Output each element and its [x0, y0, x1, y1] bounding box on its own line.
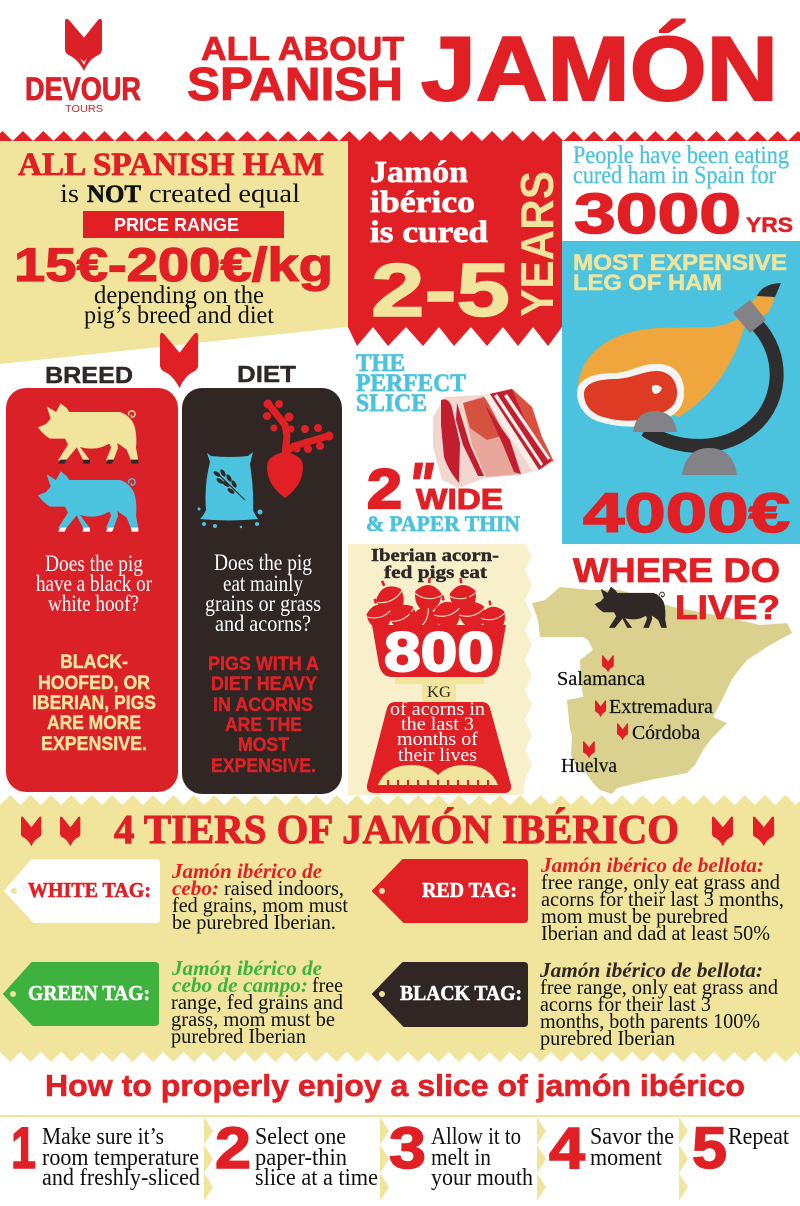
- zigzag border top: [0, 131, 800, 141]
- scale body: their lives: [398, 745, 477, 766]
- map shape: [532, 587, 792, 794]
- price range label: PRICE RANGE: [114, 215, 239, 235]
- white tag description: be purebred Iberian.: [172, 910, 336, 934]
- years label: YEARS: [511, 171, 563, 317]
- icon: black-hoofed pig: [38, 403, 138, 464]
- title: JAMÓN: [421, 19, 778, 120]
- answer: ARE MORE: [47, 713, 141, 734]
- caption: depending on the: [94, 282, 264, 309]
- question: grains or grass: [205, 591, 321, 616]
- panel: most expensive leg: [562, 241, 800, 544]
- step 5: [692, 1116, 789, 1181]
- red tag: [373, 860, 527, 922]
- scale body: the last 3: [401, 714, 474, 735]
- black tag: [373, 963, 527, 1026]
- step 4: [549, 1116, 674, 1181]
- question: [36, 551, 152, 616]
- step 5: Repeat: [728, 1124, 789, 1150]
- answer: [32, 652, 156, 755]
- place names: [557, 668, 713, 777]
- answer: MOST: [238, 735, 289, 756]
- logo wordmark: DEVOUR: [25, 71, 141, 107]
- step 1: 1: [11, 1116, 36, 1181]
- curing text: ibérico: [370, 184, 475, 219]
- answer: BLACK-: [60, 652, 128, 673]
- black tag description: acorns for their last 3: [540, 992, 711, 1016]
- price: 15€-200€/kg: [14, 238, 333, 291]
- question: and acorns?: [215, 611, 311, 636]
- scale body: of acorns in: [390, 699, 486, 720]
- step 3: your mouth: [431, 1165, 533, 1191]
- black tag description: purebred Iberian: [540, 1026, 675, 1050]
- step 2: paper-thin: [255, 1145, 347, 1171]
- white tag description: Jamón ibérico de: [171, 859, 322, 883]
- markers: [583, 655, 628, 758]
- green tag description: range, fed grains and: [171, 990, 343, 1014]
- question: [205, 550, 321, 636]
- place names: Huelva: [561, 755, 617, 777]
- heading: LIVE?: [675, 589, 780, 627]
- heading: THE: [356, 350, 405, 377]
- heading: PERFECT: [356, 370, 466, 397]
- heading: how to enjoy: How to properly enjoy a slice of jamón ibérico: [45, 1068, 745, 1103]
- step 3: melt in: [431, 1145, 491, 1171]
- subheading: created equal: [149, 179, 300, 208]
- heading: SLICE: [356, 390, 427, 417]
- icon: fox head: [65, 19, 102, 71]
- question: have a black or: [36, 571, 152, 596]
- question: white hoof?: [48, 591, 139, 616]
- red tag description: acorns for their last 3 months,: [541, 887, 784, 911]
- scale body: months of: [397, 729, 479, 750]
- black tag: BLACK TAG:: [400, 981, 522, 1005]
- curing text: Jamón: [370, 154, 468, 189]
- icon: white-hoofed pig: [38, 471, 138, 532]
- panel: map of Spain: [532, 552, 792, 794]
- 800 number: 800: [384, 620, 494, 683]
- green tag: GREEN TAG:: [28, 981, 150, 1005]
- red tag: RED TAG:: [422, 878, 517, 902]
- step 1: Make sure it’s: [42, 1124, 164, 1150]
- 3000 number: 3000: [574, 182, 741, 246]
- red tag description: [540, 853, 784, 945]
- panel: 3000 years: [573, 142, 793, 246]
- white tag: WHITE TAG:: [28, 878, 151, 902]
- heading: [573, 552, 780, 627]
- step 3: 3: [389, 1116, 426, 1181]
- panel: breed card: [6, 388, 178, 792]
- step 3: [389, 1116, 533, 1191]
- panel: the perfect slice: [356, 350, 554, 536]
- step 2: 2: [215, 1116, 251, 1181]
- black tag description: Jamón ibérico de bellota:: [539, 958, 763, 982]
- answer: DIET HEAVY: [211, 674, 317, 695]
- question: eat mainly: [223, 571, 303, 596]
- steps: [0, 1115, 800, 1201]
- subheading: [60, 179, 300, 208]
- logo: Devour Tours: [25, 19, 141, 115]
- step 2: [215, 1116, 378, 1191]
- step 4: 4: [549, 1116, 585, 1181]
- place names: Extremadura: [609, 696, 713, 718]
- step 5: 5: [692, 1116, 727, 1181]
- answer: EXPENSIVE.: [41, 734, 147, 755]
- caption: pig’s breed and diet: [84, 302, 274, 329]
- step 4: Savor the: [590, 1124, 674, 1150]
- KG label: KG: [427, 684, 451, 701]
- white tag description: raised indoors,: [224, 876, 344, 900]
- heading: Iberian acorn-: [371, 545, 499, 565]
- scale body: [367, 699, 511, 793]
- heading: 4 TIERS OF JAMÓN IBÉRICO: [114, 806, 679, 852]
- years number: 2-5: [371, 248, 510, 332]
- icon: fox divider: [160, 333, 198, 388]
- white tag description: cebo:: [172, 876, 219, 900]
- panel: 800 kg of acorns: [348, 544, 532, 795]
- icons: fox row left: [21, 816, 80, 846]
- question: Does the pig: [45, 551, 143, 576]
- answer: [208, 654, 319, 777]
- icon: grain sack: [198, 452, 262, 528]
- panel: curing time: [348, 141, 563, 346]
- logo subtitle: TOURS: [65, 104, 103, 115]
- curing text: is cured: [370, 214, 488, 249]
- step 3: Allow it to: [431, 1124, 521, 1150]
- yrs: YRS: [746, 214, 793, 237]
- black tag description: months, both parents 100%: [540, 1009, 760, 1033]
- green tag description: purebred Iberian: [171, 1024, 306, 1048]
- answer: IN ACORNS: [213, 695, 313, 716]
- price: 4000€: [583, 481, 790, 544]
- red tag description: Jamón ibérico de bellota:: [540, 853, 764, 877]
- heading: ALL SPANISH HAM: [18, 147, 324, 183]
- heading: WHERE DO: [573, 552, 780, 590]
- heading: fed pigs eat: [384, 562, 487, 582]
- white tag description: fed grains, mom must: [172, 893, 348, 917]
- white tag: [5, 860, 159, 922]
- step 4: moment: [590, 1145, 662, 1171]
- green tag description: free: [312, 973, 343, 997]
- answer: EXPENSIVE.: [211, 756, 316, 777]
- answer: HOOFED, OR: [38, 673, 150, 694]
- step 2: Select one: [255, 1124, 346, 1150]
- icon: ham slice: [433, 388, 554, 488]
- red tag description: Iberian and dad at least 50%: [541, 921, 770, 945]
- caption: & PAPER THIN: [366, 511, 520, 536]
- place names: Córdoba: [632, 722, 700, 744]
- 2 inch number: WIDE: [416, 484, 503, 516]
- icon: acorn basket: [363, 575, 508, 702]
- black tag description: [539, 958, 778, 1050]
- 2 inch number: ": [408, 451, 434, 518]
- black tag description: free range, only eat grass and: [540, 975, 778, 999]
- heading: [356, 350, 466, 417]
- heading: MOST EXPENSIVE: [573, 250, 787, 275]
- icon: ham leg on stand: [577, 283, 781, 475]
- caption: [84, 282, 274, 329]
- step 2: slice at a time: [255, 1165, 378, 1191]
- heading: [371, 545, 499, 582]
- 2 inch number: 2: [367, 457, 402, 520]
- answer: ARE THE: [225, 715, 302, 736]
- step 1: room temperature: [42, 1145, 199, 1171]
- heading: LEG OF HAM: [573, 270, 722, 295]
- panel: all Spanish ham: [0, 141, 347, 364]
- green tag description: [171, 956, 343, 1048]
- green tag description: Jamón ibérico de: [171, 956, 322, 980]
- answer: IBERIAN, PIGS: [32, 693, 156, 714]
- title: [187, 19, 778, 120]
- 2 inch number: [367, 451, 503, 520]
- heading: breed: BREED: [45, 362, 133, 388]
- step 1: [11, 1116, 200, 1191]
- answer: PIGS WITH A: [208, 654, 319, 675]
- title: ALL ABOUT: [201, 30, 404, 67]
- red tag description: mom must be purebred: [541, 904, 728, 928]
- icon: acorn with leaves: [263, 400, 334, 498]
- price range label: [83, 211, 284, 238]
- curing text: [370, 154, 488, 249]
- icon: black pig: [595, 587, 667, 628]
- green tag description: grass, mom must be: [171, 1007, 335, 1031]
- white tag description: [171, 859, 348, 934]
- step 1: and freshly-sliced: [42, 1165, 200, 1191]
- red tag description: free range, only eat grass and: [541, 870, 780, 894]
- panel: diet card: [182, 388, 342, 794]
- question: Does the pig: [214, 550, 312, 575]
- panel: 3000 years: cured ham in Spain for: [573, 162, 777, 189]
- icons: fox row right: [712, 816, 774, 846]
- subheading: NOT: [87, 181, 141, 208]
- heading: diet: DIET: [237, 361, 296, 387]
- heading: [573, 250, 787, 295]
- panel: 4 tiers: [0, 795, 800, 1062]
- green tag: [4, 963, 158, 1025]
- subheading: is: [60, 179, 79, 208]
- title: SPANISH: [187, 58, 403, 110]
- place names: Salamanca: [557, 668, 645, 690]
- green tag description: cebo de campo:: [172, 973, 308, 997]
